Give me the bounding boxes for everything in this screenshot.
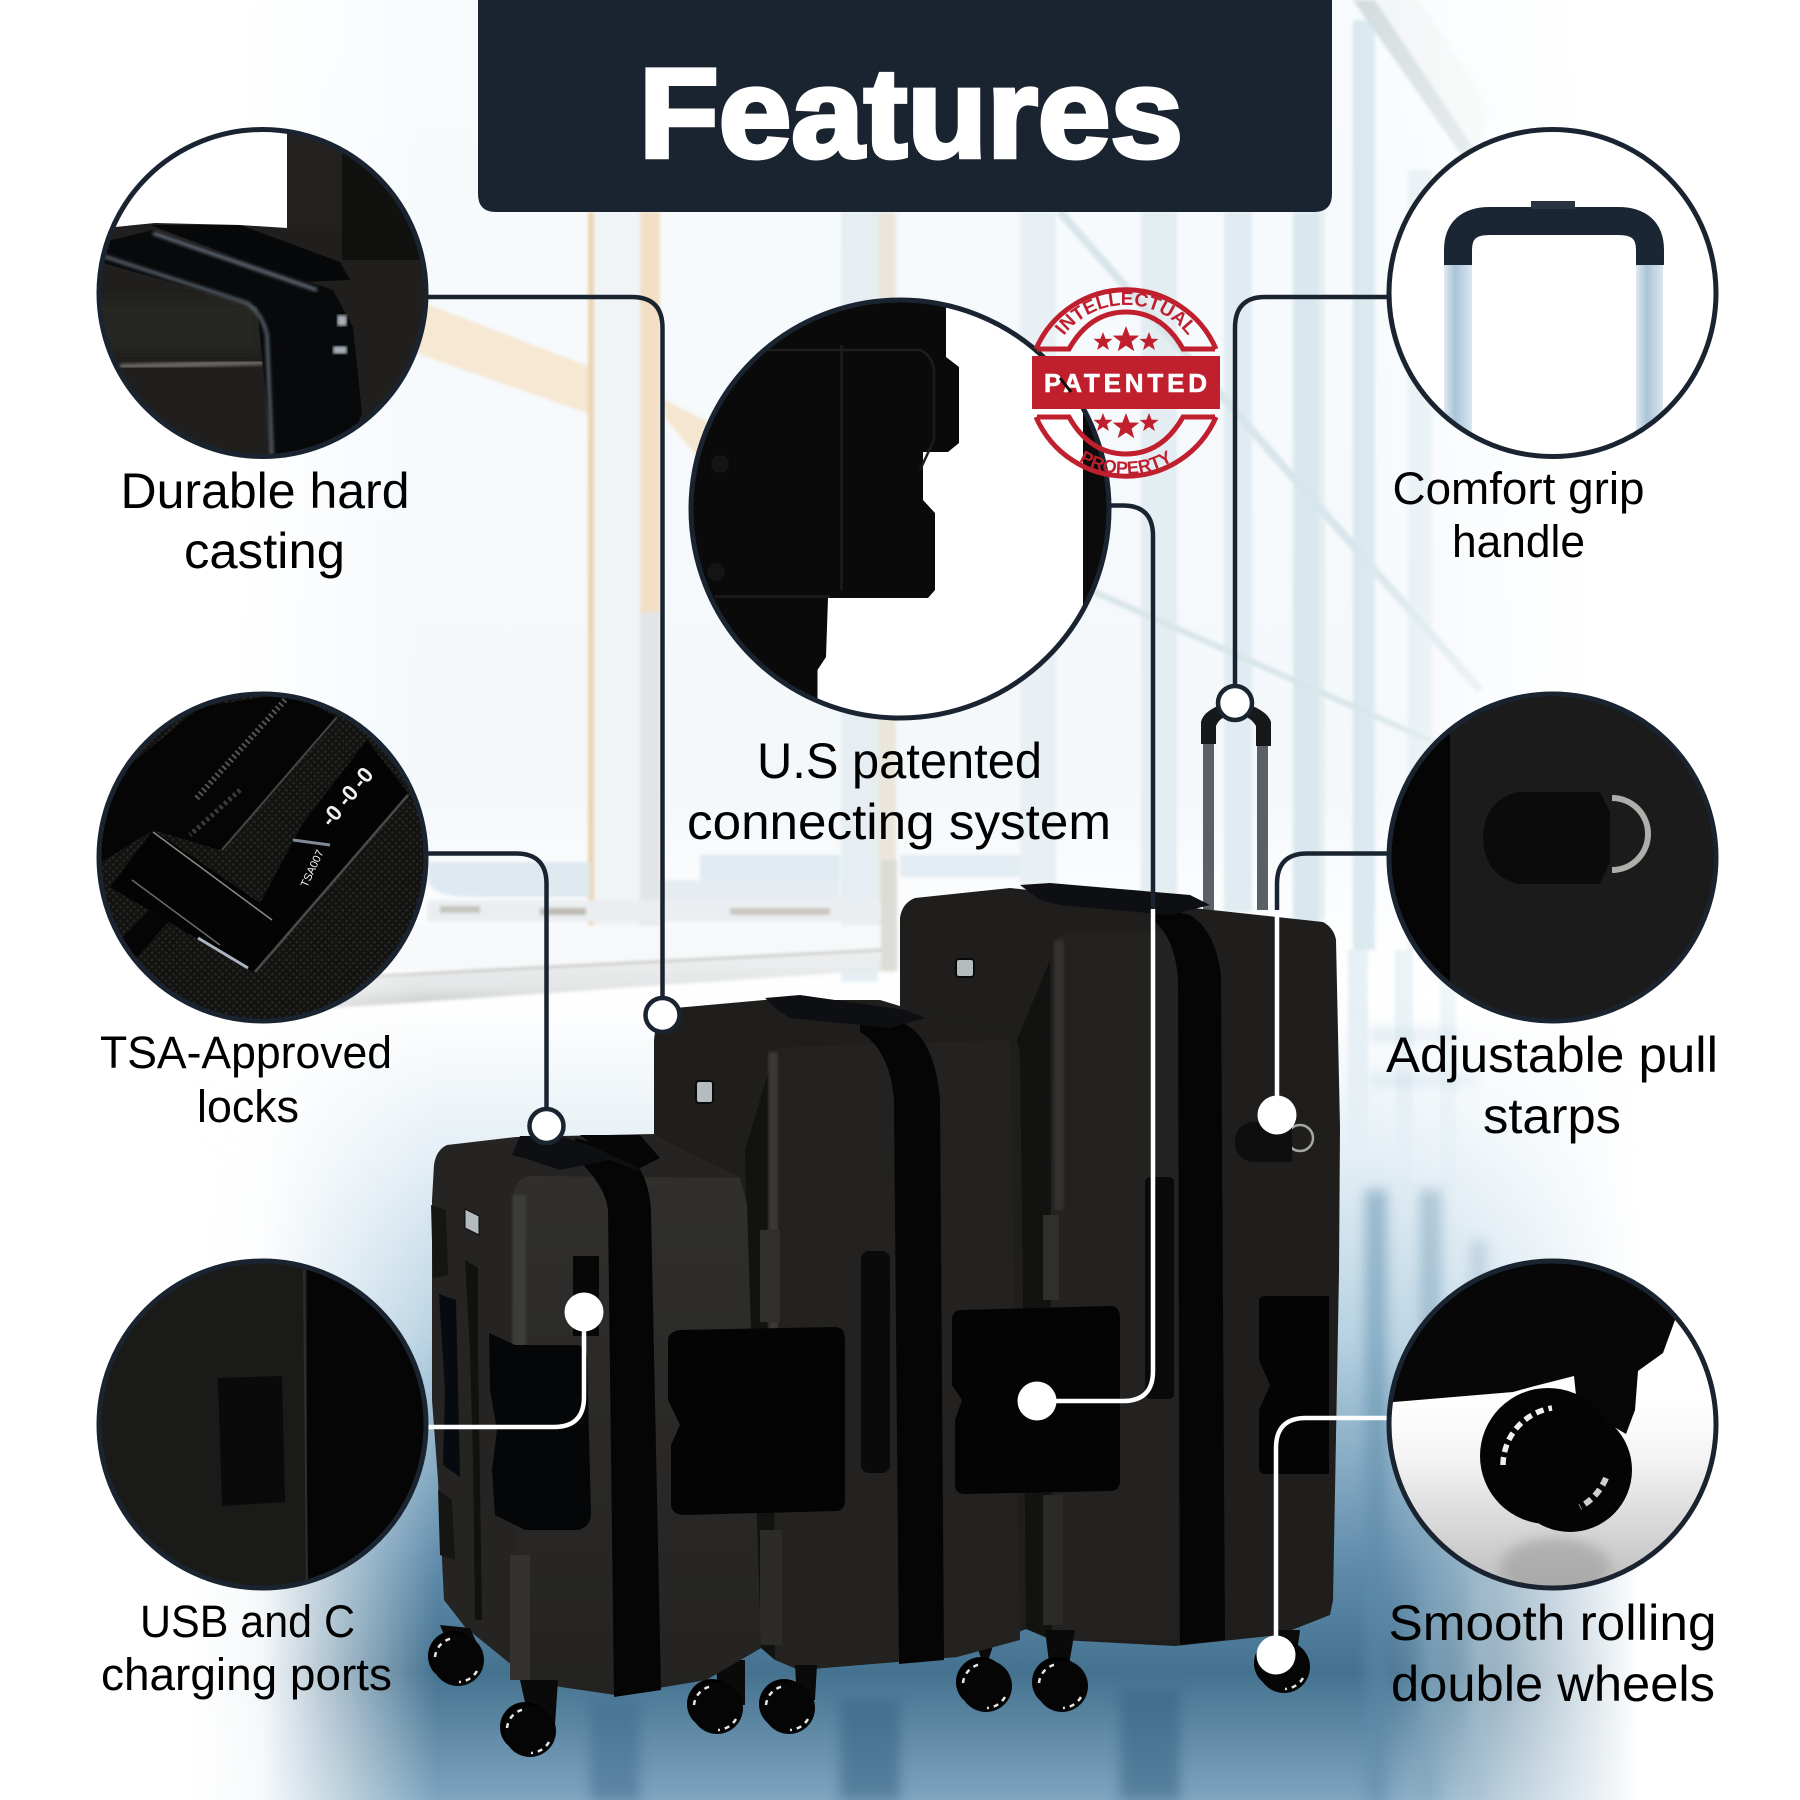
lock dials: -0 [347, 762, 378, 793]
label: U.S patented connecting system [687, 733, 1111, 850]
label: adjustable pull starps: Adjustable pull [1386, 1027, 1718, 1083]
lock dials: -0 [332, 780, 363, 811]
side slot [1145, 1177, 1174, 1399]
label: smooth rolling double wheels: Smooth rolling [1388, 1595, 1716, 1651]
lock dials: TSA007 [299, 848, 327, 889]
label: U.S patented connecting system: U.S patented [757, 733, 1042, 789]
zipper band [575, 1138, 661, 1697]
label: TSA-approved locks: TSA-Approved [100, 1027, 392, 1078]
top straps [765, 995, 925, 1028]
icon: patented stamp: PROPERTY [1080, 450, 1169, 474]
large suitcase [900, 883, 1340, 1670]
label: comfort grip handle: handle [1452, 516, 1585, 567]
circle: comfort grip handle [1389, 130, 1716, 464]
connector: durable hard casting [427, 297, 680, 1032]
circle: adjustable pull straps [1385, 690, 1725, 1030]
top straps [512, 1136, 640, 1172]
telescopic handle [1201, 705, 1271, 910]
circle: U.S patented connecting system [685, 295, 1125, 725]
left side grips [431, 1205, 455, 1560]
icon: patented stamp: PATENTED [1044, 368, 1207, 398]
label: smooth rolling double wheels [1388, 1595, 1716, 1712]
label: comfort grip handle [1392, 463, 1644, 567]
left plate [439, 1294, 460, 1477]
label: TSA-approved locks: locks [197, 1081, 299, 1132]
faint floor stripes, right [1348, 949, 1456, 1105]
panel: header bar [478, 0, 1332, 212]
connector: adjustable pull straps [1258, 854, 1392, 1134]
wheels [428, 1631, 1310, 1757]
airplane and jetway [411, 854, 1020, 968]
lock dials [300, 768, 372, 886]
wheel stems [715, 1660, 817, 1705]
USB port slot [573, 1256, 599, 1336]
label: USB and C charging ports: charging ports [101, 1649, 392, 1700]
window wall [334, 0, 1483, 1105]
icon: patented stamp: INTELLECTUAL [1054, 292, 1193, 336]
label: U.S patented connecting system: connecting system [687, 794, 1111, 850]
tag [956, 959, 974, 977]
top straps [1020, 883, 1210, 915]
floor reflection [244, 1024, 1628, 1800]
label: USB and C charging ports [101, 1596, 392, 1700]
label: adjustable pull starps [1386, 1027, 1718, 1144]
label: comfort grip handle: Comfort grip [1392, 463, 1644, 514]
tag [696, 1081, 713, 1103]
circle: durable hard casting [90, 120, 435, 465]
connector: rolling wheels [1256, 1418, 1392, 1674]
connector: USB ports [427, 1292, 604, 1427]
label: USB and C charging ports: USB and C [140, 1596, 355, 1647]
wheel stems [440, 1625, 558, 1725]
connector: TSA locks [427, 854, 564, 1143]
right connector plate [1259, 1296, 1329, 1474]
lock dials: -0 [316, 800, 347, 831]
zipper band [1150, 905, 1225, 1645]
circle: USB and C ports [90, 1255, 435, 1600]
side slot [861, 1251, 890, 1473]
luggage set [428, 705, 1340, 1757]
zipper band [860, 1012, 944, 1664]
label: adjustable pull starps: starps [1483, 1088, 1621, 1144]
connector plate, large to medium [952, 1306, 1120, 1494]
small suitcase [431, 1134, 761, 1725]
title: Features [639, 42, 1183, 184]
wheel stems [970, 1625, 1300, 1670]
medium suitcase [654, 995, 1026, 1705]
label: durable hard casting: Durable hard [120, 463, 410, 519]
icon: patented stamp [1032, 287, 1220, 479]
connector: comfort grip handle [1218, 297, 1392, 720]
label: durable hard casting [120, 463, 410, 579]
label: smooth rolling double wheels: double wheels [1391, 1656, 1715, 1712]
circle: TSA-approved locks [90, 690, 435, 1035]
background: airport terminal [244, 0, 1628, 1800]
connector: patented connecting system [1018, 506, 1153, 1420]
pull knob and ring [1235, 1122, 1313, 1162]
connector plate, small front [489, 1333, 591, 1530]
label: TSA-approved locks [100, 1027, 392, 1132]
circle: smooth rolling wheels [1385, 1255, 1725, 1598]
tag [465, 1209, 479, 1235]
connector plate, medium to small [668, 1327, 845, 1515]
label: durable hard casting: casting [184, 523, 345, 579]
